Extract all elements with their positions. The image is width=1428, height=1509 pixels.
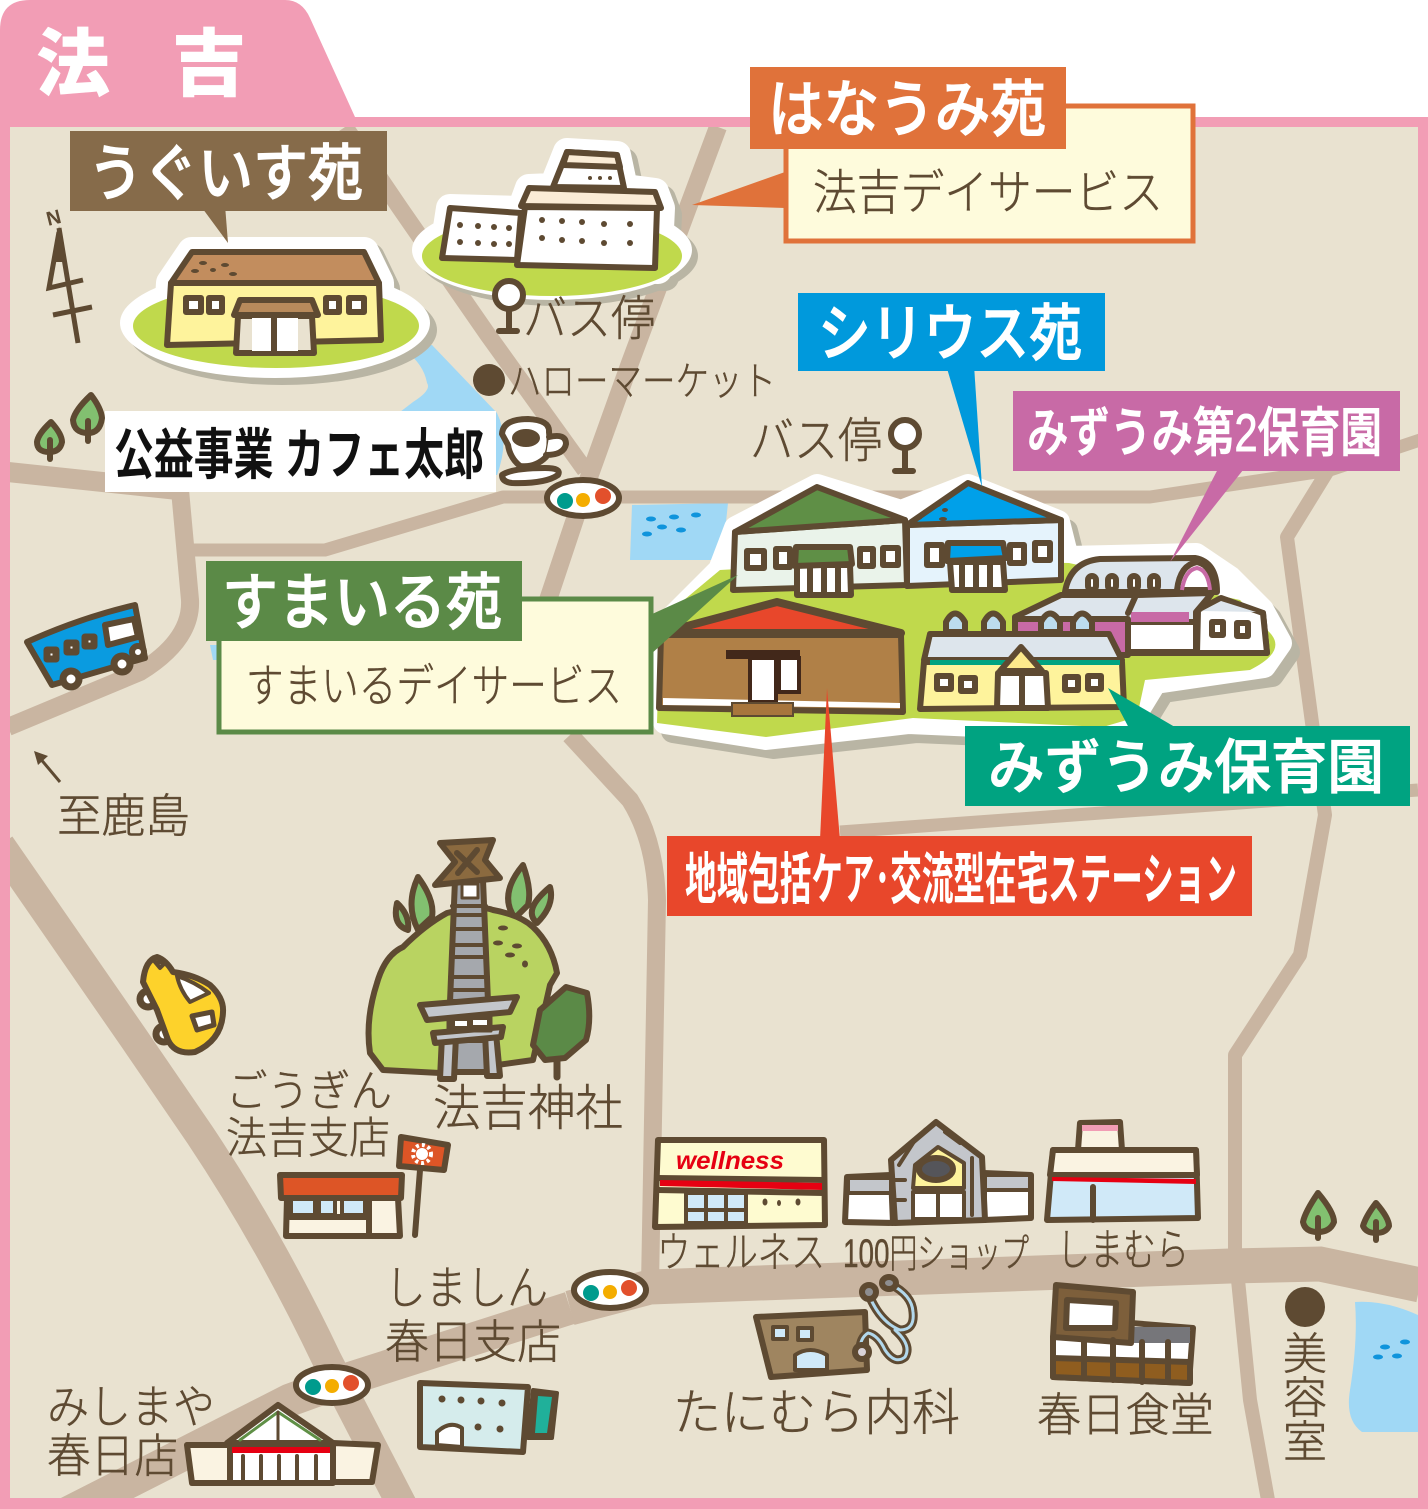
label: Shimashin Kasuga branch — [385, 1262, 561, 1368]
label: Goginbank Hokki branch: 法吉支店 — [226, 1115, 390, 1163]
label: Shimashin Kasuga branch: しましん — [385, 1262, 548, 1314]
label: Kasuga restaurant: 春日食堂 — [1037, 1389, 1214, 1441]
title: 法 — [36, 23, 110, 106]
title — [36, 23, 246, 106]
arrow to Kashima — [34, 751, 60, 782]
label: Mishimaya Kasuga store: 春日店 — [47, 1430, 178, 1482]
wellness logo: wellness — [676, 1147, 784, 1175]
traffic signal — [547, 480, 619, 516]
Hello Market dot — [473, 364, 505, 396]
label: 100 yen shop: 100円ショップ — [843, 1232, 1029, 1276]
shrine hill, torii gate and trees — [369, 840, 589, 1079]
icon: Shimashin bank — [420, 1383, 557, 1452]
label: beauty salon: 室 — [1283, 1418, 1327, 1467]
callout: community care station — [667, 688, 1252, 916]
water areas — [210, 345, 1418, 1432]
icon: Shimamura store — [1047, 1122, 1198, 1220]
building: Sumairu-en green house — [733, 487, 907, 595]
label: Wellness: ウェルネス — [657, 1229, 825, 1276]
icon: 100 yen shop — [845, 1122, 1031, 1223]
bus stop icon east — [891, 420, 919, 471]
trees northwest — [37, 395, 102, 459]
main road — [570, 1264, 1420, 1308]
label: Shimashin Kasuga branch: 春日支店 — [385, 1316, 561, 1368]
callout: mizuumi no.2 nursery — [1013, 391, 1400, 562]
traffic signal south — [574, 1272, 646, 1308]
bus stop label: バス停 — [523, 293, 655, 346]
callout: sumairu-en: すまいる苑 — [222, 569, 502, 638]
callout: mizuumi nursery: みずうみ保育園 — [988, 735, 1384, 801]
label: beauty salon: 美 — [1283, 1330, 1327, 1379]
domes — [946, 614, 1092, 632]
cafe label — [105, 411, 496, 492]
icon: Wellness store — [655, 1140, 825, 1227]
building: Sirius-en blue house — [907, 483, 1061, 590]
label: beauty salon — [1283, 1330, 1327, 1467]
label: Kashima direction: 至鹿島 — [57, 790, 190, 842]
compass north arrow: N — [44, 206, 63, 231]
Hello Market label: ハローマーケット — [508, 360, 776, 404]
title: 吉 — [172, 23, 246, 106]
icon: Kasuga restaurant — [1053, 1285, 1193, 1383]
label: Mishimaya Kasuga store — [47, 1381, 215, 1482]
main complex island — [657, 483, 1288, 747]
traffic signal southwest — [296, 1367, 368, 1403]
building: community care station — [659, 602, 903, 716]
callout: hanaumi-en — [692, 67, 1193, 241]
callout: sirius-en — [798, 293, 1105, 487]
callout: sirius-en: シリウス苑 — [818, 300, 1082, 369]
callout: hanaumi-en: 法吉デイサービス — [813, 167, 1163, 220]
callout: sumairu-en — [206, 561, 738, 732]
island: hanaumi-en building — [412, 152, 698, 306]
trees southeast — [1303, 1193, 1389, 1240]
island: uguisu-en building — [120, 252, 437, 385]
label: Goginbank Hokki branch: ごうぎん — [226, 1067, 392, 1116]
label: Shimamura: しまむら — [1057, 1226, 1189, 1275]
icon: bus — [27, 605, 145, 687]
label: Goginbank Hokki branch — [226, 1067, 392, 1163]
callout: mizuumi nursery — [965, 688, 1410, 806]
compass north arrow — [44, 206, 92, 343]
icon: Mishimaya store — [187, 1405, 378, 1483]
label: beauty salon: 容 — [1283, 1374, 1327, 1423]
callout: sumairu-en: すまいるデイサービス — [246, 660, 622, 712]
icon: yellow car — [140, 957, 223, 1052]
building: Mizuumi No.2 nursery — [1015, 558, 1267, 655]
bus stop icon — [495, 281, 523, 331]
icon: bank and flag — [280, 1137, 448, 1236]
icon: Taniura clinic with stethoscope — [756, 1277, 913, 1377]
callout: uguisu-en — [70, 131, 387, 243]
building: Mizuumi nursery — [920, 634, 1124, 709]
callout: hanaumi-en: はなうみ苑 — [768, 76, 1046, 145]
icon: coffee cup — [502, 419, 566, 483]
callout: uguisu-en: うぐいす苑 — [88, 140, 363, 209]
label: Mishimaya Kasuga store: みしまや — [47, 1381, 215, 1433]
label: Taniura clinic: たにむら内科 — [673, 1385, 960, 1441]
bus stop label east: バス停 — [750, 415, 882, 468]
cafe name: 公益事業 カフェ太郎 — [114, 424, 484, 486]
beauty salon dot — [1285, 1287, 1325, 1327]
label: Hokki shrine: 法吉神社 — [433, 1082, 623, 1136]
